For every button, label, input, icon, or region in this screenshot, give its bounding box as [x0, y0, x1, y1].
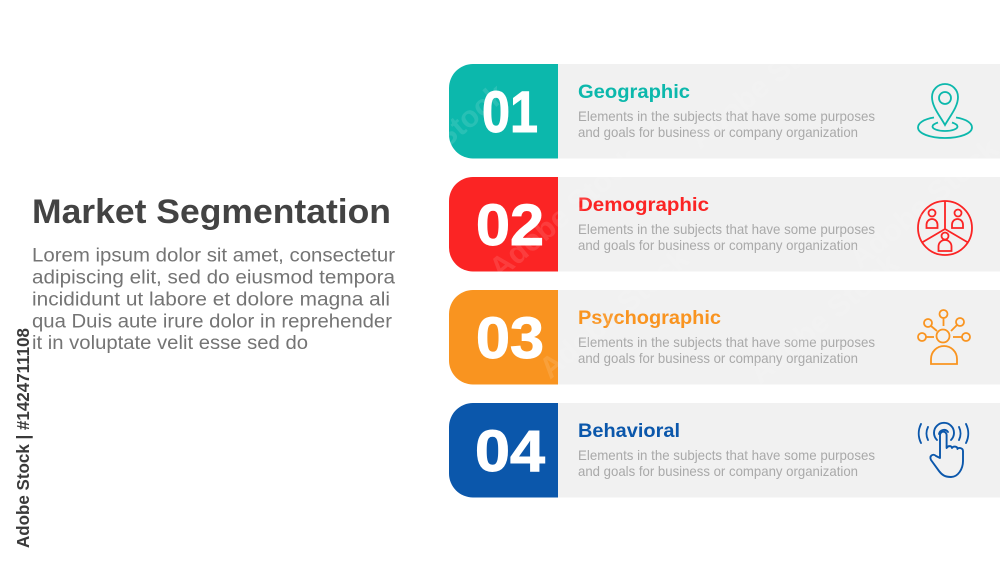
panel: geographic	[449, 64, 1000, 158]
description: Elements in the subjects that have some purposes	[578, 447, 875, 463]
description	[578, 447, 875, 479]
watermarks	[428, 12, 1000, 390]
number tab	[449, 403, 558, 498]
panel background	[558, 403, 1000, 498]
title: Market Segmentation	[32, 193, 391, 231]
icon: map pin	[918, 84, 972, 138]
description: Elements in the subjects that have some purposes	[578, 108, 875, 124]
number tab	[449, 177, 558, 272]
icon: tapping hand	[919, 423, 968, 477]
description: and goals for business or company organization	[578, 124, 858, 140]
heading: Geographic	[578, 82, 690, 103]
watermarks: Adobe Stock	[683, 12, 845, 155]
body text block: incididunt ut labore et dolore magna ali	[32, 290, 390, 310]
body text block	[32, 246, 396, 354]
icon: person with connected nodes	[918, 310, 970, 364]
panel: behavioral	[449, 403, 1000, 498]
description	[578, 334, 875, 366]
description: and goals for business or company organization	[578, 350, 858, 366]
panel: demographic	[449, 177, 1000, 272]
description	[578, 108, 875, 140]
heading: Behavioral	[578, 421, 680, 442]
body text block: qua Duis aute irure dolor in reprehender	[32, 312, 393, 332]
description	[578, 221, 875, 253]
watermarks: Adobe Stock	[533, 242, 695, 385]
panel background	[558, 177, 1000, 272]
watermarks: Stock	[428, 77, 512, 155]
body text block: it in voluptate velit esse sed do	[32, 333, 308, 354]
description: and goals for business or company organization	[578, 237, 858, 253]
description: Elements in the subjects that have some purposes	[578, 334, 875, 350]
number: 02	[476, 193, 544, 258]
number tab	[449, 64, 558, 158]
description: Elements in the subjects that have some purposes	[578, 221, 875, 237]
icon: segmented people circle	[918, 201, 972, 255]
body text block: adipiscing elit, sed do eiusmod tempora	[32, 268, 395, 288]
watermarks: Adobe Stock	[483, 142, 645, 285]
number: 01	[482, 80, 538, 145]
panel: psychographic	[449, 290, 1000, 384]
number: 03	[476, 306, 544, 371]
number: 04	[475, 419, 545, 484]
panel background	[558, 64, 1000, 158]
panel background	[558, 290, 1000, 384]
side credit: Adobe Stock | #1424711108	[13, 328, 33, 548]
description: and goals for business or company organization	[578, 463, 858, 479]
number tab	[449, 290, 558, 384]
heading: Psychographic	[578, 308, 721, 329]
body text block: Lorem ipsum dolor sit amet, consectetur	[32, 246, 396, 266]
watermarks: Adobe Stock	[743, 247, 905, 390]
heading: Demographic	[578, 195, 709, 216]
